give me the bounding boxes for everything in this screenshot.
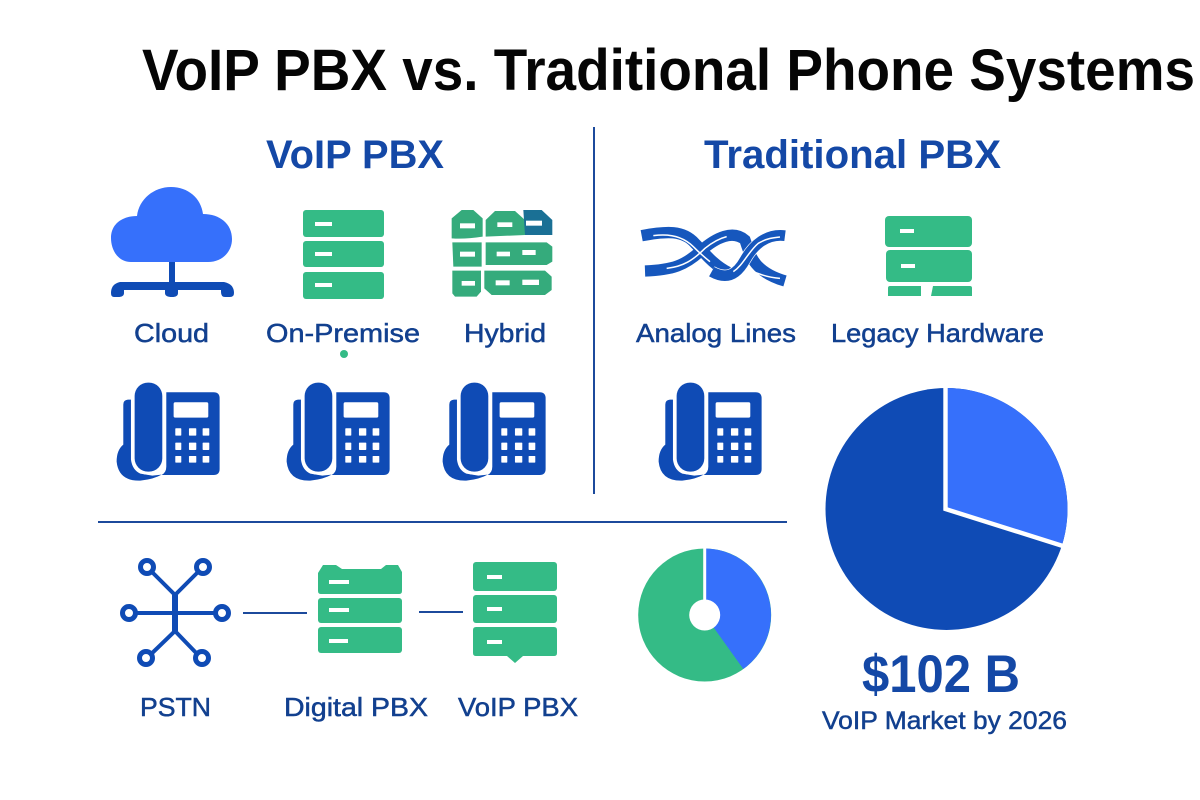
- panel: Traditional PBX components: [636, 216, 1044, 481]
- connector: PSTN to Digital PBX: [243, 612, 307, 614]
- panel: VoIP PBX deployment types: [111, 187, 552, 481]
- chart: VoIP market pie: [826, 386, 1068, 630]
- label: Cloud: Cloud: [134, 318, 209, 348]
- icon: desk phone 1: [117, 383, 220, 481]
- heading: VoIP PBX: VoIP PBX: [266, 133, 444, 177]
- label: On-Premise: On-Premise: [266, 318, 420, 348]
- label: PSTN: PSTN: [140, 692, 211, 722]
- icon: hybrid server grid: [452, 210, 552, 297]
- label: Analog Lines: Analog Lines: [636, 318, 796, 348]
- panel: PBX evolution flow: [122, 560, 578, 722]
- label: Hybrid: Hybrid: [464, 318, 546, 348]
- icon: Digital PBX server: [318, 565, 402, 653]
- icon: VoIP PBX server: [473, 562, 557, 663]
- label: VoIP PBX: VoIP PBX: [458, 692, 578, 722]
- icon: on-premise server: [303, 210, 384, 299]
- caption: VoIP Market by 2026: VoIP Market by 2026: [822, 707, 1067, 735]
- icon: cloud network: [111, 187, 234, 297]
- stat: market value: [822, 645, 1067, 735]
- heading: Traditional PBX: Traditional PBX: [704, 133, 1001, 177]
- label: Digital PBX: Digital PBX: [284, 692, 428, 722]
- icon: PSTN network: [122, 560, 228, 664]
- icon: desk phone 2: [287, 383, 390, 481]
- label: Legacy Hardware: Legacy Hardware: [831, 318, 1044, 348]
- green dot: [340, 350, 348, 358]
- value: $102 B: $102 B: [862, 645, 1020, 704]
- icon: twisted analog lines: [642, 233, 785, 281]
- icon: desk phone 3: [443, 383, 546, 481]
- chart: donut share: [638, 548, 771, 682]
- connector: Digital PBX to VoIP PBX: [419, 611, 463, 613]
- icon: legacy hardware server: [885, 216, 972, 296]
- icon: desk phone 4: [659, 383, 762, 481]
